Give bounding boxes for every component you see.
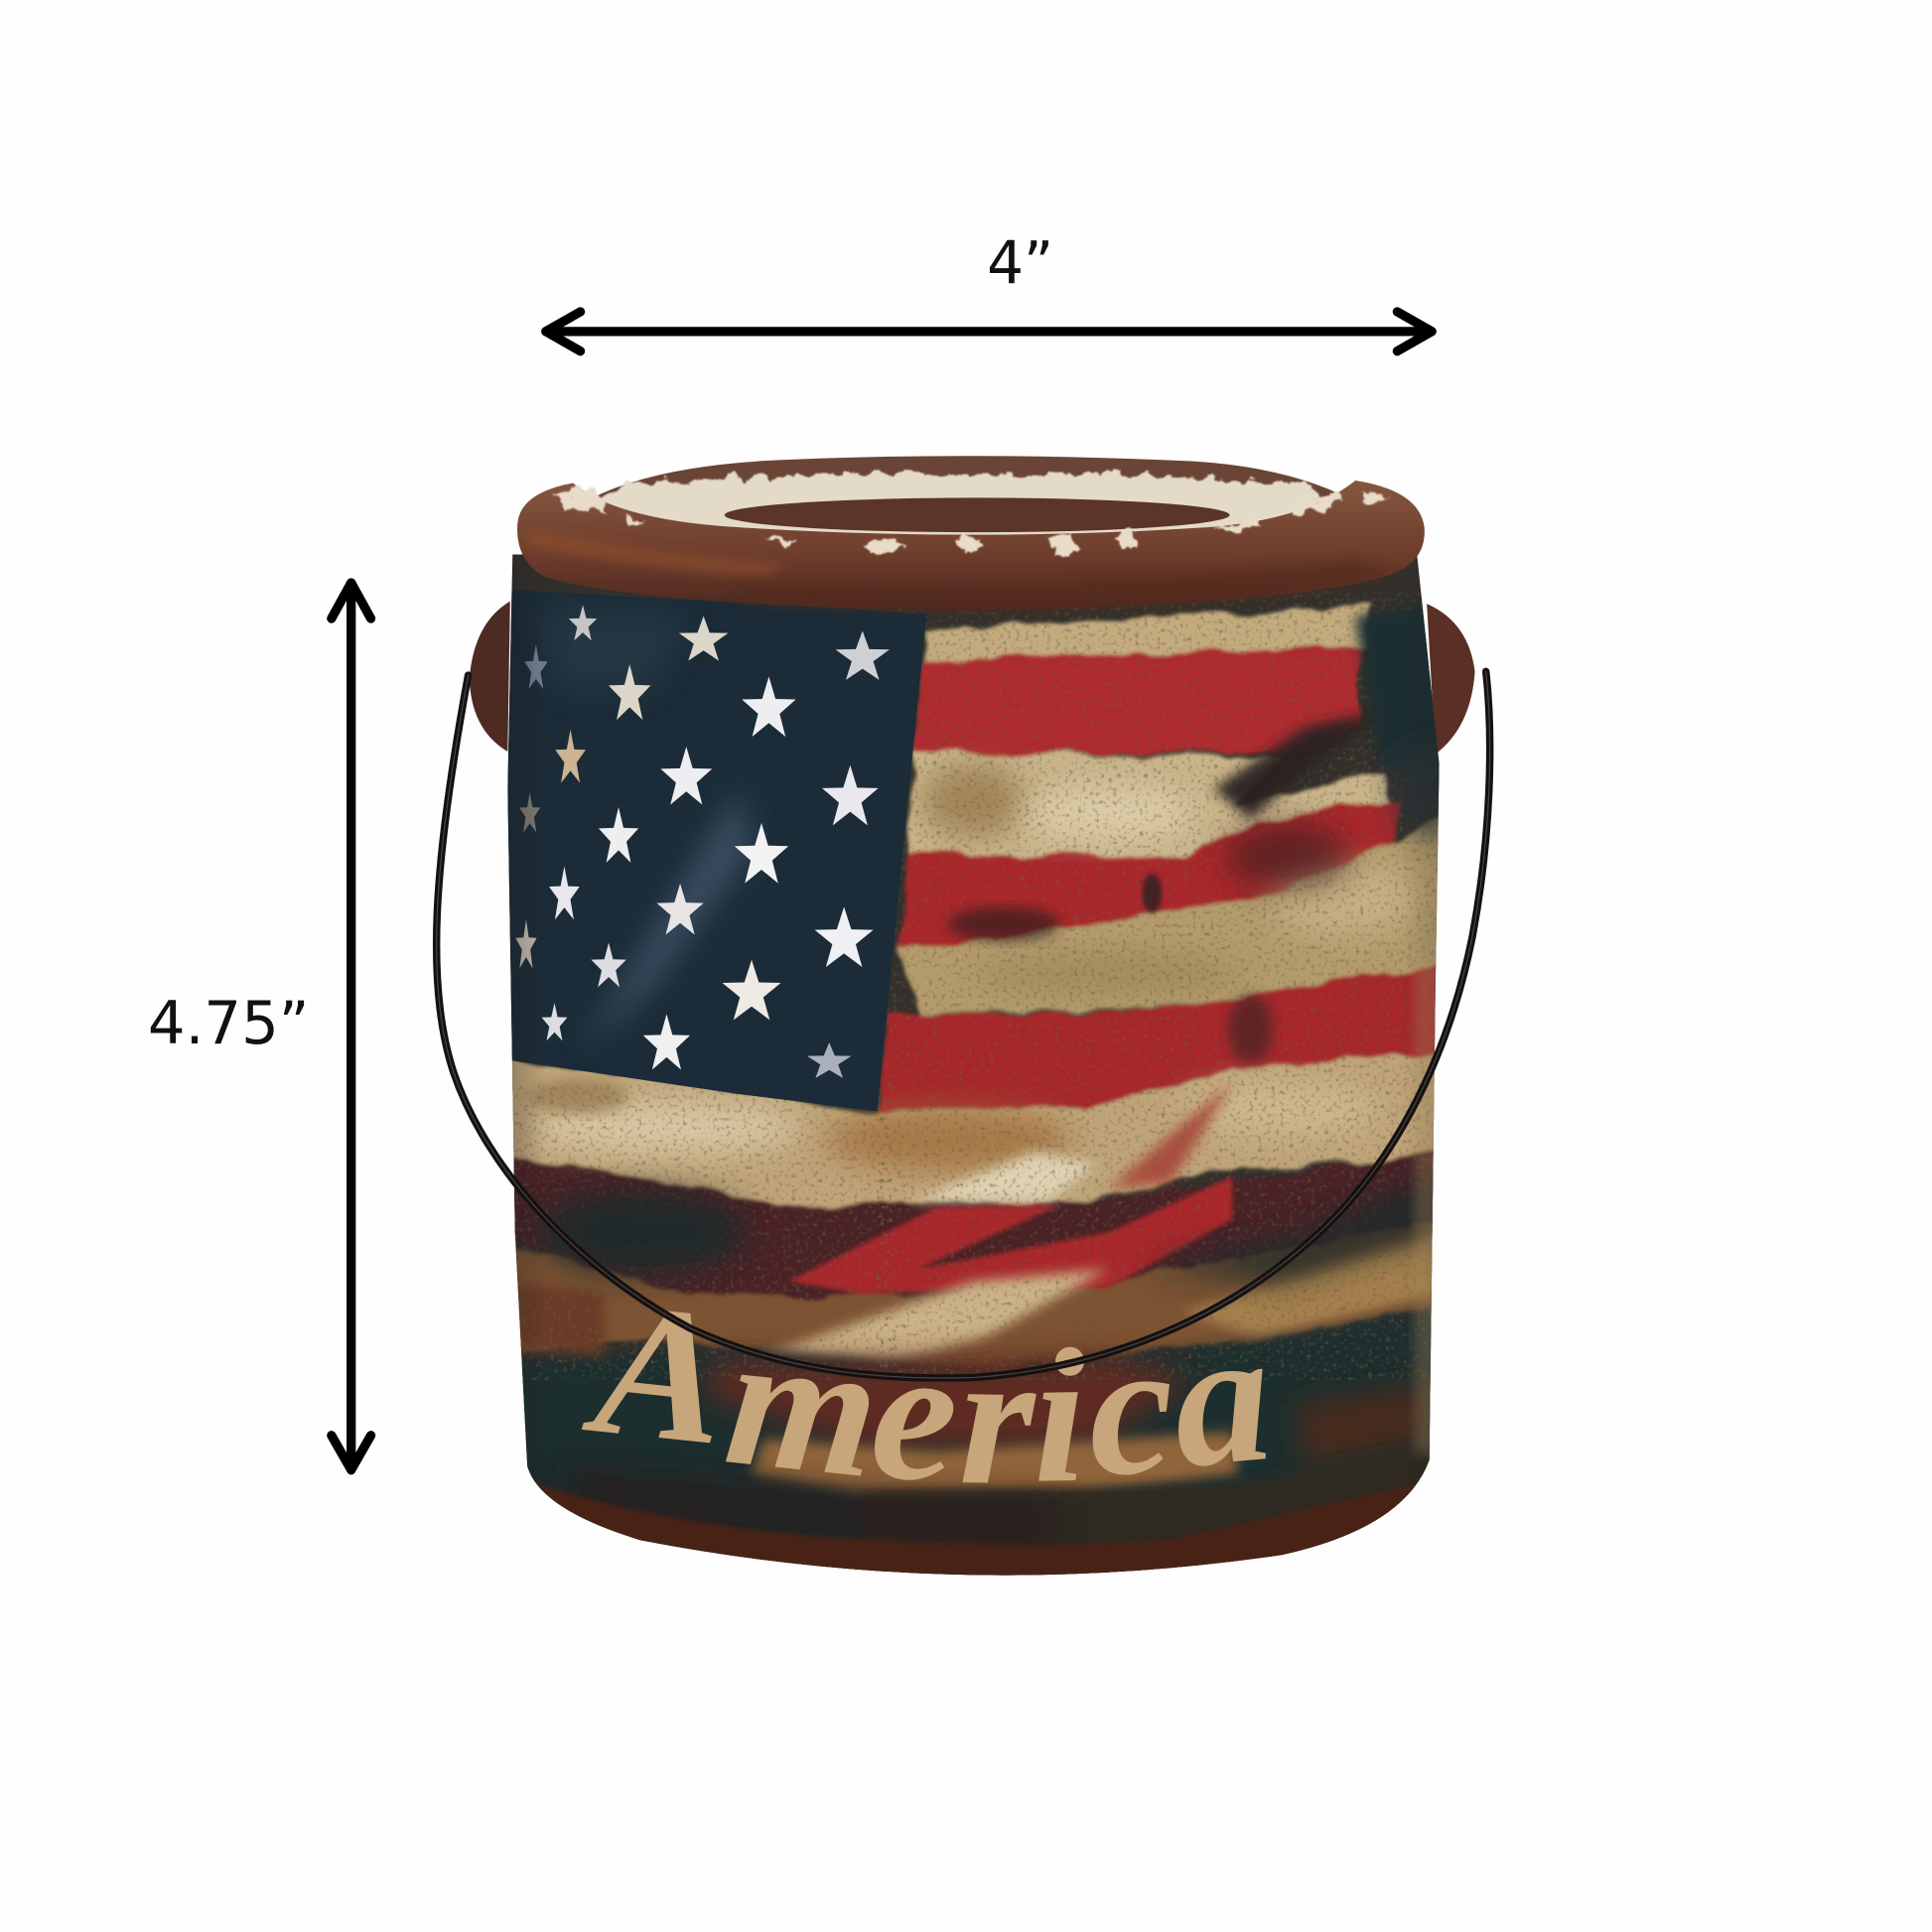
- rim outer lip: [517, 481, 1425, 610]
- handle knob right: [1427, 604, 1475, 755]
- dark teal band behind name: [505, 1307, 1442, 1601]
- grain texture on stripes: [878, 592, 1448, 1380]
- rim chipped paint flecks: [548, 487, 1386, 554]
- flag shading light and dark washes: [530, 763, 1442, 1365]
- rim: [517, 456, 1425, 610]
- brown base band: [534, 1481, 1418, 1576]
- rim back edge: [579, 456, 1361, 554]
- stars: [515, 605, 890, 1078]
- dimension label: height 4.75 inches: 4.75”: [148, 990, 310, 1058]
- arrow: horizontal width: [546, 312, 1432, 351]
- handle knob left: [470, 602, 510, 752]
- arrow: vertical height: [332, 583, 371, 1470]
- dark lower band: [864, 1446, 1430, 1545]
- wire handle: [437, 671, 1490, 1378]
- edge shading: [499, 542, 1448, 1601]
- bucket body with flag: [492, 542, 1453, 1601]
- dimension label: width 4 inches: 4”: [987, 229, 1053, 298]
- flag stripes: [505, 607, 1442, 1370]
- infographic canvas: [151, 240, 1493, 1576]
- rim rust and shadow: [527, 530, 788, 577]
- candle bucket product: [437, 456, 1490, 1601]
- product name: America: [576, 1259, 1279, 1525]
- inner opening: [725, 497, 1230, 532]
- stars canton: [499, 589, 926, 1111]
- burn and shadow patches: [536, 604, 1445, 1453]
- inner cream wall: [592, 474, 1361, 550]
